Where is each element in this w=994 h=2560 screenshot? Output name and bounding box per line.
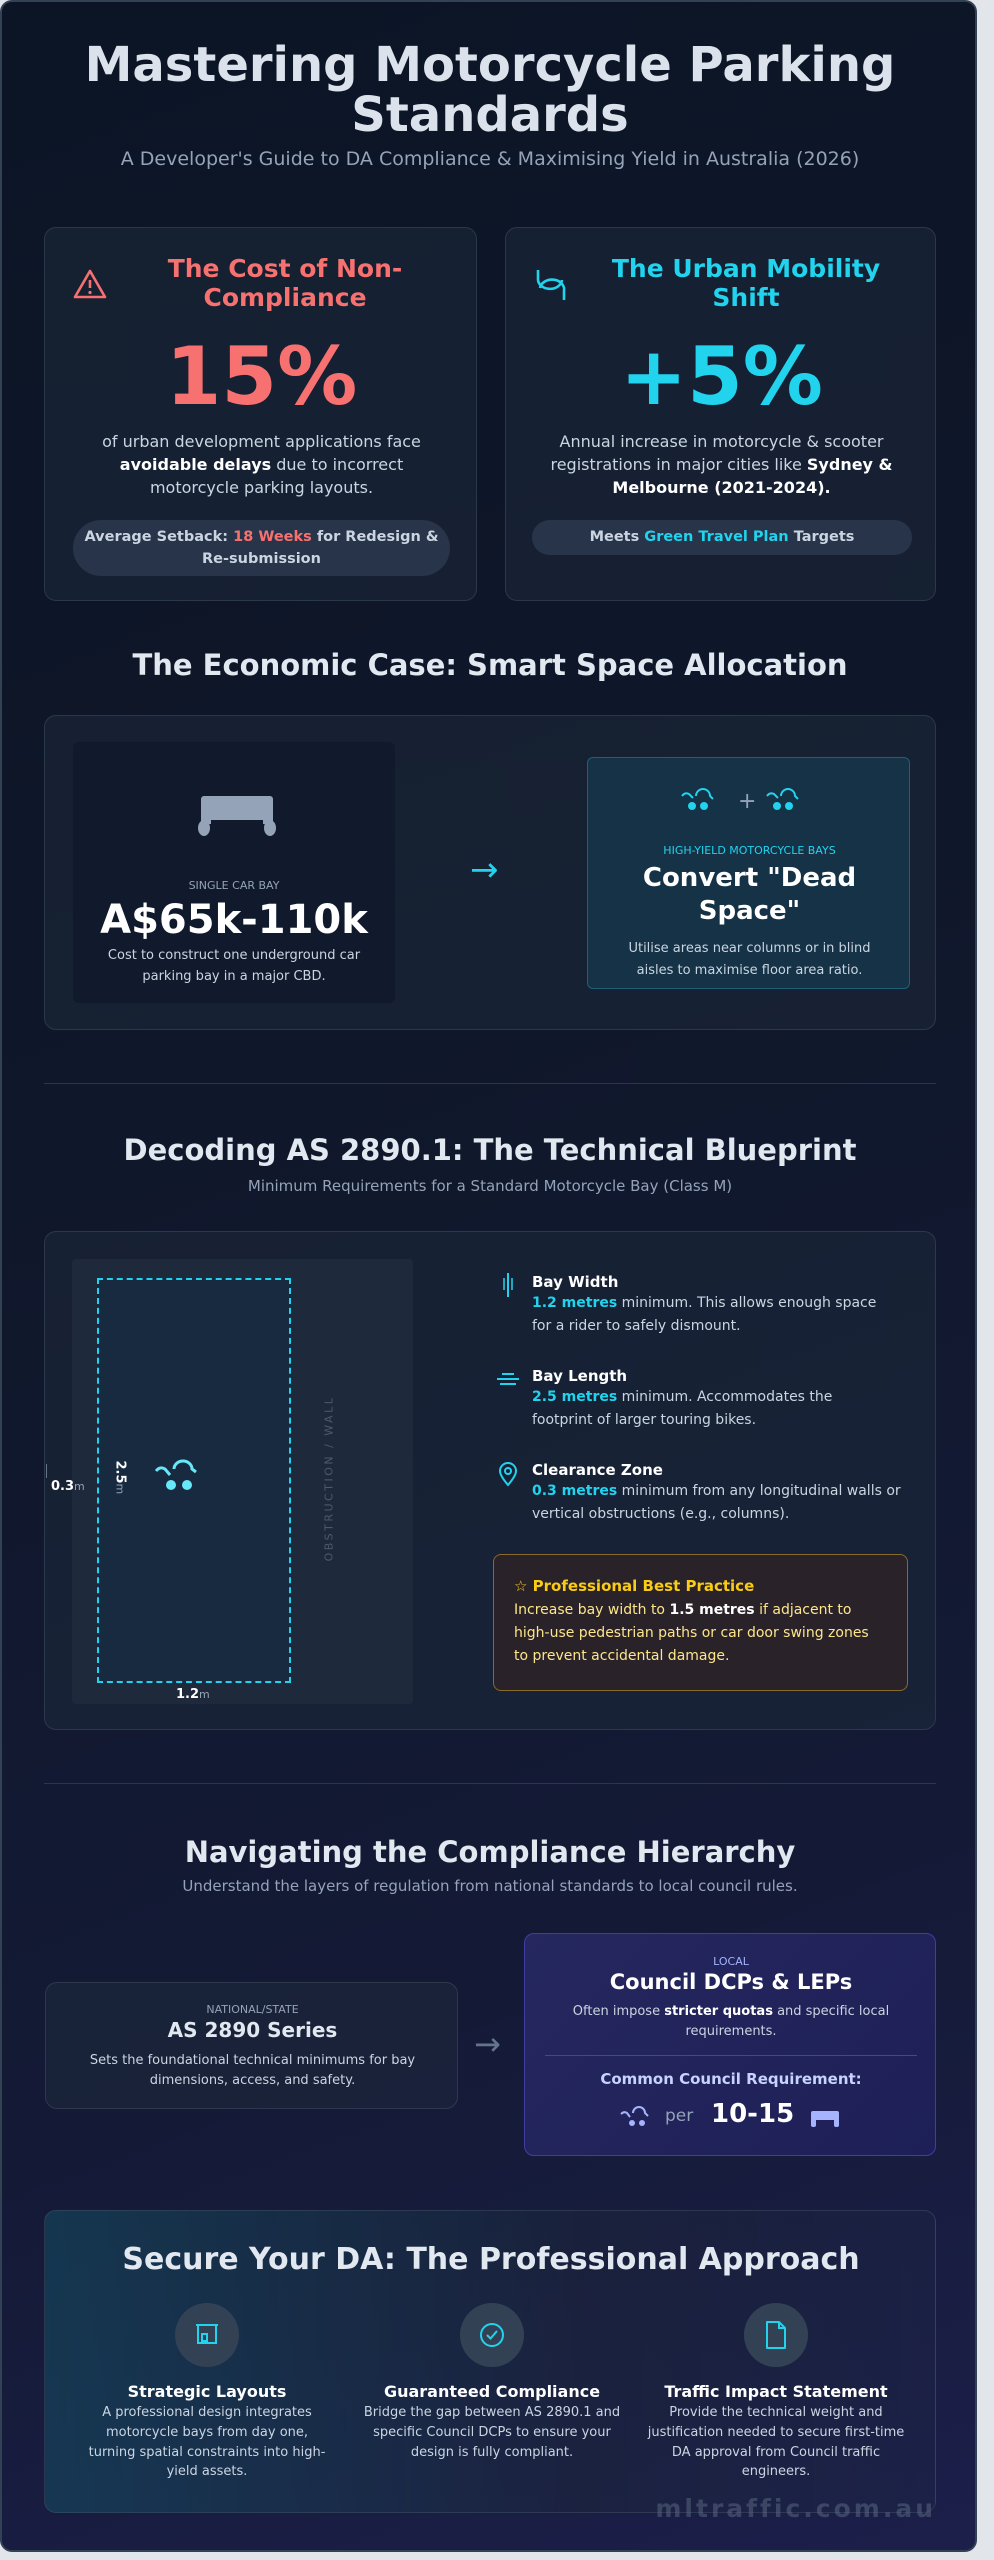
column: guaranteed compliance: Guaranteed Compliance <box>384 2382 600 2401</box>
spec: bay length <box>497 1367 832 1428</box>
subheading: Minimum Requirements for a Standard Motorcycle Bay (Class M) <box>248 1177 732 1195</box>
title <box>85 37 895 143</box>
stat: +5%: +5% <box>620 330 823 423</box>
panel: local council: LOCAL <box>713 1955 749 1968</box>
heading: economic case: The Economic Case: Smart Space Allocation <box>132 648 848 682</box>
description: of urban development applications face avoidable delays due to incorrect motorcycle parking layouts. <box>102 432 421 497</box>
column: guaranteed compliance: Bridge the gap between AS 2890.1 and specific Council DCPs to ensure your design is fully compliant. <box>364 2405 620 2460</box>
heading <box>168 254 402 312</box>
ratio: motorcycle per 10-15 cars <box>620 2099 839 2129</box>
column: strategic layouts: Strategic Layouts <box>128 2382 286 2401</box>
icon: layout <box>175 2303 239 2367</box>
icon: car <box>198 796 276 836</box>
heading <box>643 863 856 926</box>
pill: setback: Average Setback: 18 Weeks for Redesign & <box>84 529 439 545</box>
panel: urban mobility <box>505 227 936 601</box>
arrow: → <box>474 2025 501 2063</box>
ratio: motorcycle per 10-15 cars: 10-15 <box>711 2099 794 2129</box>
subheading: Understand the layers of regulation from national standards to local council rules. <box>182 1877 798 1895</box>
pill: setback <box>73 520 450 576</box>
title: Standards <box>351 87 629 143</box>
spec: bay width: 1.2 metres minimum. This allows enough space for a rider to safely dismount. <box>532 1295 876 1334</box>
heading: Convert "Dead <box>643 863 856 893</box>
panel: national/state: AS 2890 Series <box>168 2018 337 2042</box>
spec: clearance zone: Clearance Zone <box>532 1461 663 1479</box>
panel: economic case <box>44 715 936 1030</box>
heading: compliance hierarchy: Navigating the Compliance Hierarchy <box>185 1835 795 1869</box>
spec: bay length: 2.5 metres minimum. Accommodates the footprint of larger touring bikes. <box>532 1389 832 1428</box>
heading <box>612 254 880 312</box>
spec: bay width <box>503 1273 876 1334</box>
icon: width <box>503 1273 513 1297</box>
cost: A$65k-110k <box>100 897 368 943</box>
description: Cost to construct one underground car parking bay in a major CBD. <box>108 948 360 984</box>
bay outline <box>97 1278 291 1683</box>
heading: The Cost of Non- <box>168 254 402 283</box>
panel: local council: Council DCPs & LEPs <box>610 1970 852 1994</box>
icon: motorcycle <box>154 1460 197 1490</box>
panel: national/state <box>45 1982 458 2109</box>
spec: clearance zone: 0.3 metres minimum from any longitudinal walls or vertical obstructions (e.g., columns). <box>532 1483 901 1522</box>
stat: 15%: 15% <box>166 330 357 423</box>
icon: check <box>460 2303 524 2367</box>
panel: cost of non-compliance <box>44 227 477 601</box>
label: 1.2m: 1.2m <box>176 1687 210 1702</box>
label: SINGLE CAR BAY <box>189 879 279 892</box>
heading: Shift <box>712 283 780 312</box>
pill: green travel <box>532 520 912 555</box>
heading: decoding AS 2890.1: Decoding AS 2890.1: The Technical Blueprint <box>124 1133 856 1167</box>
icon: pin <box>499 1462 517 1486</box>
heading: The Urban Mobility <box>612 254 880 283</box>
panel: local council: Common Council Requirement: <box>600 2070 862 2088</box>
heading: Compliance <box>203 283 367 312</box>
motorcycle box <box>587 757 910 989</box>
panel: national/state: Sets the foundational technical minimums for bay dimensions, access, and safety. <box>90 2053 415 2088</box>
label: 2.5m: 2.5 m <box>112 1460 128 1494</box>
icon: motorcycles <box>681 788 799 814</box>
icon: document <box>744 2303 808 2367</box>
description: Annual increase in motorcycle & scooter registrations in major cities like Sydney & Melbourne (2021-2024). <box>550 432 893 497</box>
icon: cycle arrows <box>536 270 566 300</box>
icon: warning <box>74 270 106 298</box>
heading: Space" <box>699 896 800 926</box>
callout: professional best practice <box>493 1554 908 1691</box>
column: traffic impact statement <box>648 2303 904 2479</box>
pill: green travel: Meets Green Travel Plan Targets <box>590 529 854 545</box>
panel: technical blueprint <box>44 1231 936 1730</box>
heading: Secure Your DA: The Professional Approach <box>122 2242 860 2277</box>
panel: local council <box>524 1933 936 2156</box>
subtitle: A Developer's Guide to DA Compliance & Maximising Yield in Australia (2026) <box>121 148 859 170</box>
icon: length <box>497 1373 519 1385</box>
callout title: ☆ Professional Best Practice <box>514 1577 754 1595</box>
title: Mastering Motorcycle Parking <box>85 37 895 93</box>
icon: motorcycles: + <box>738 789 756 814</box>
spec: bay width: Bay Width <box>532 1273 618 1291</box>
description: Utilise areas near columns or in blind aisles to maximise floor area ratio. <box>628 941 871 978</box>
ratio: motorcycle per 10-15 cars: per <box>665 2106 693 2126</box>
column: strategic layouts: A professional design integrates motorcycle bays from day one, turning spatial constraints into high-yield assets. <box>89 2405 325 2479</box>
label: obstruction / wall: OBSTRUCTION / WALL <box>322 1396 336 1561</box>
spec: bay length: Bay Length <box>532 1367 627 1385</box>
column: traffic impact statement: Provide the technical weight and justification needed to secure first-time DA approval from Council traffic engineers. <box>648 2405 904 2479</box>
label: HIGH-YIELD MOTORCYCLE BAYS <box>663 844 836 857</box>
panel: professional approach <box>44 2210 936 2513</box>
spec: clearance zone <box>499 1461 901 1522</box>
pill: setback: Re-submission <box>202 551 321 567</box>
column: traffic impact statement: Traffic Impact Statement <box>664 2382 888 2401</box>
column: guaranteed compliance <box>364 2303 620 2460</box>
panel: local council: Often impose stricter quotas and specific local requirements. <box>573 2004 889 2039</box>
diagram: motorcycle bay <box>46 1278 336 1702</box>
car bay box <box>73 742 395 1003</box>
callout text: Increase bay width to 1.5 metres if adjacent to high-use pedestrian paths or car door swing zones to prevent accidental damage. <box>514 1602 869 1664</box>
arrow: → <box>470 850 498 890</box>
column: strategic layouts <box>88 2303 325 2479</box>
panel: national/state: NATIONAL/STATE <box>206 2003 299 2016</box>
label: 0.3m: 0.3m <box>51 1479 85 1494</box>
watermark: mltraffic.com.au <box>655 2494 936 2523</box>
